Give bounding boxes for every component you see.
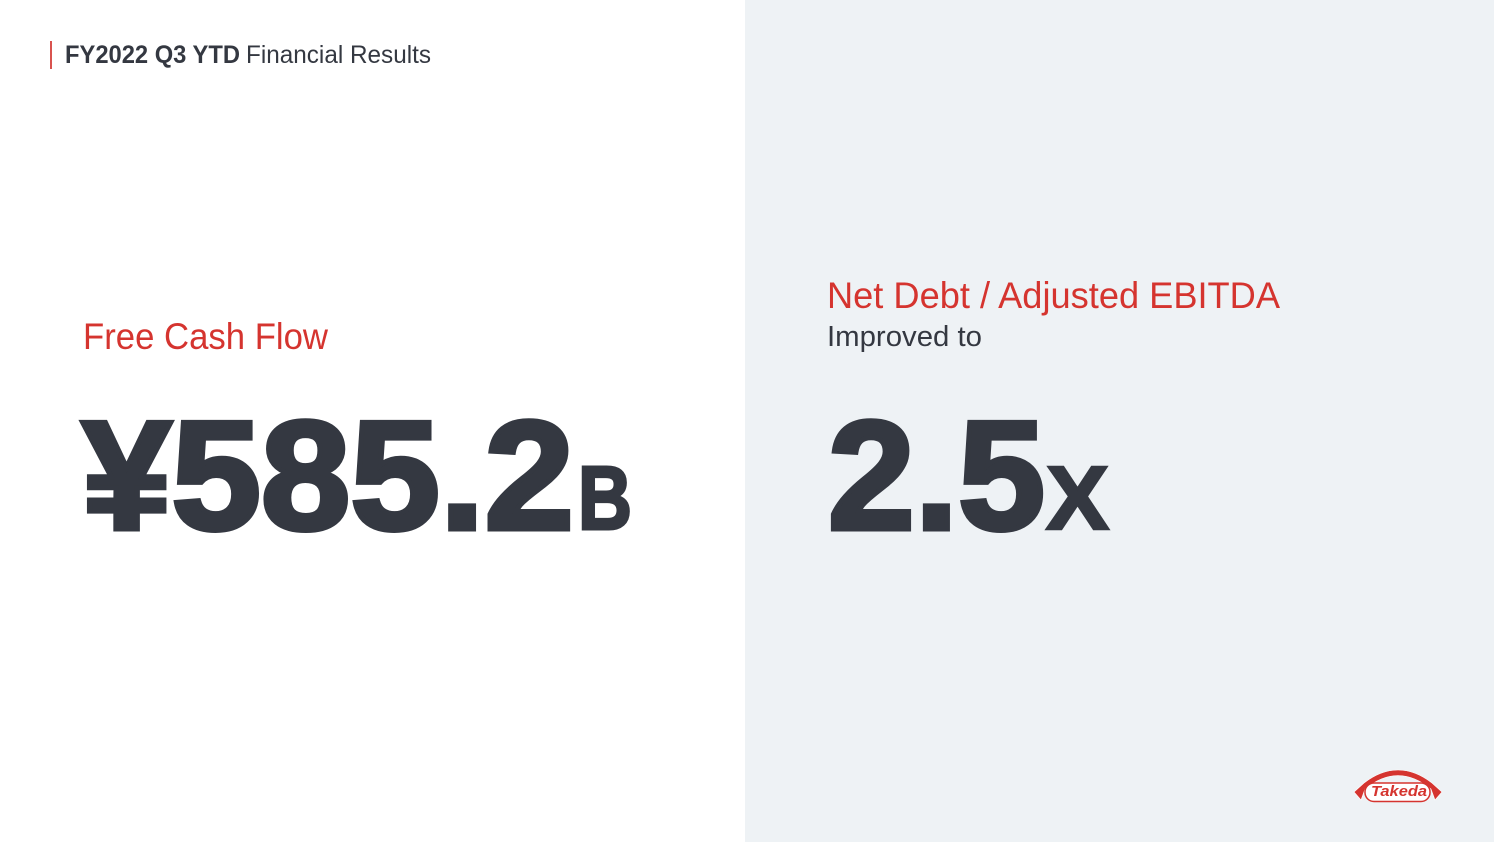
metric: leverage value: 2.5 bbox=[828, 389, 1045, 562]
metric: free cash flow value: B bbox=[578, 449, 632, 549]
heading: free cash flow: Free Cash Flow bbox=[83, 316, 328, 357]
metric: free cash flow value: ¥585.2 bbox=[82, 389, 574, 562]
metric: leverage value: X bbox=[1046, 449, 1109, 549]
subheading: improved to: Improved to bbox=[827, 321, 982, 353]
title bbox=[65, 41, 431, 69]
header accent bar bbox=[50, 41, 52, 69]
panel: net debt to adjusted EBITDA bbox=[827, 275, 1280, 562]
title: Financial Results bbox=[246, 41, 431, 69]
title: FY2022 Q3 YTD bbox=[65, 41, 240, 69]
panel: free cash flow bbox=[82, 316, 632, 562]
panel: net debt background bbox=[745, 0, 1494, 842]
icon: Takeda logo: Takeda bbox=[1371, 783, 1427, 800]
heading: net debt / adjusted EBITDA: Net Debt / Adjusted EBITDA bbox=[827, 275, 1280, 316]
icon: Takeda logo bbox=[1354, 770, 1442, 802]
